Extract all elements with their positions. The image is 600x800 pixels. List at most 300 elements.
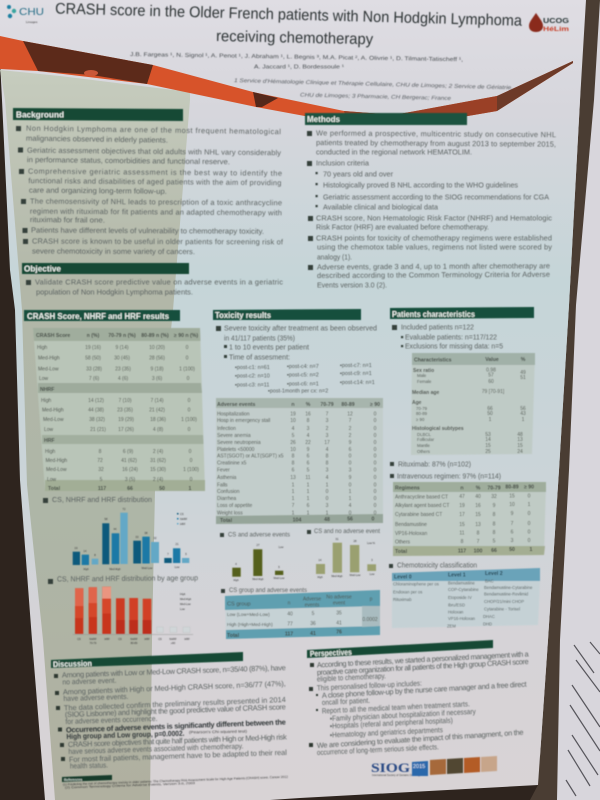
logo: CHU Limoges: CHU — [19, 7, 44, 18]
table: characteristics: 56 — [520, 406, 526, 412]
discussion text: CRASH score objectives that quite half patients with High or Med-High risk — [68, 732, 287, 749]
decorative wave band — [0, 36, 573, 124]
table: adverse events: 8 — [307, 418, 310, 424]
table: regimens: 8 — [493, 512, 496, 518]
table: chemotoxicity classification: Etoposide IV — [448, 595, 472, 600]
table: CRASH score results: Med-High — [46, 458, 67, 464]
table: adverse events: Hosp in emergency stall — [217, 418, 270, 424]
table: adverse events: 56 — [347, 516, 353, 522]
table: chemotoxicity classification: DHD — [483, 622, 492, 626]
heading: objective: Objective — [24, 264, 62, 274]
table: characteristics: 48 — [517, 432, 523, 438]
bullet 2: Geriatric assessment objectives that old adults with NHL vary considerably — [27, 146, 281, 157]
table: characteristics: 70-79 — [416, 406, 428, 411]
table: CRASH score results: 1 (100) — [179, 366, 195, 372]
table: CRASH score results: Med-Low — [46, 467, 67, 473]
bar chart: CS and no adverse event: 28 — [354, 539, 357, 543]
table: adverse events: 17 — [324, 440, 330, 446]
bar chart: CS and adverse events: 4 — [235, 562, 237, 566]
table: regimens: 0 — [528, 538, 531, 544]
table: adverse events: 8 — [292, 460, 295, 466]
discussion text: health status. — [70, 761, 108, 770]
table: adverse events: 0 — [349, 482, 352, 488]
methods text: CRASH points for toxicity of chemotherapy regimens were established — [316, 234, 552, 242]
table: CS group and adverse events: events — [305, 602, 320, 608]
table: adverse events: 6 — [307, 454, 310, 460]
table: chemotoxicity classification: CHOP/21/mini CHOP — [484, 599, 524, 604]
bullet 3 — [19, 167, 282, 197]
toxicity summary: 1 to 10 events per patient — [229, 342, 309, 352]
table: regimens: 32 — [491, 494, 497, 500]
perspectives text: oncall for patient. — [322, 696, 370, 707]
table: regimens — [393, 482, 546, 556]
table: adverse events: 10 — [290, 447, 296, 453]
bar chart: CS and adverse events — [232, 543, 284, 582]
table: chemotoxicity classification: Rituximab — [393, 597, 412, 602]
chart legend: CS — [180, 512, 184, 516]
table: adverse events: 3 — [326, 503, 329, 509]
table: regimens: 3 — [511, 538, 514, 544]
table: CRASH score results: 28 (56) — [149, 356, 165, 362]
heading: patients characteristics: Patients characteristics — [392, 310, 476, 319]
table: characteristics: 1 — [522, 417, 525, 423]
logo: SIOG 2015: International Society of Geriatric Oncology — [372, 773, 421, 777]
bullet 4: rituximab for frail one. — [30, 215, 105, 225]
toxicity summary: ▪post-c3: n=11 — [235, 382, 269, 388]
bar chart: CS, NHRF and HRF distribution: 21 — [176, 542, 179, 546]
table: regimens: 80-89 — [505, 484, 519, 490]
table: adverse events: 3 — [307, 426, 310, 432]
toxicity summary: ▪post-c2: n=10 — [235, 374, 270, 380]
table: CRASH score results: High — [45, 449, 56, 455]
table: regimens: 100 — [474, 548, 482, 554]
toxicity summary: ▪post-c4: n=7 — [287, 364, 319, 370]
toxicity summary: ▪post-c1: n=61 — [235, 365, 270, 371]
table: adverse events: Hospitalization — [217, 412, 250, 418]
table: adverse events: 9 — [307, 447, 310, 453]
table: characteristics: Follicular — [417, 437, 435, 442]
logo: UCOG HeLim — [529, 13, 570, 33]
objective text: population of Non Hodgkin Lymphoma patients. — [36, 288, 193, 296]
table: adverse events: 13 — [290, 475, 296, 481]
table: adverse events: 0 — [374, 468, 377, 474]
table: adverse events: % — [306, 402, 311, 408]
title: CRASH score in the Older French patients with Non Hodgkin Lymphoma — [55, 1, 523, 30]
stacked bar chart: distribution by age group: CS — [158, 637, 162, 641]
table: characteristics: 79 [70-91] — [482, 389, 505, 395]
table: regimens: n — [460, 486, 464, 492]
table: CRASH score results: 72 — [97, 458, 103, 464]
table: characteristics: Histological subtypes — [412, 426, 464, 432]
inclusion summary: Exclusions for missing data: n=5 — [405, 342, 503, 350]
table: chemotoxicity classification: ZEM — [447, 624, 456, 628]
methods text: Available clinical and biological data — [323, 202, 439, 212]
table: adverse events: 0 — [349, 510, 352, 516]
table: adverse events: 1 — [307, 496, 310, 502]
methods text: using the chemotox table values, regimens not listed were scored by — [317, 242, 552, 252]
table: adverse events: Fever — [217, 468, 230, 474]
table: CS group and adverse events: 40 — [287, 612, 293, 618]
table: chemotoxicity classification: Chloraminophene per os — [393, 582, 439, 586]
stacked bar chart: distribution by age group: HRF — [104, 637, 110, 641]
table: CRASH score results: 18 (36) — [150, 417, 166, 423]
table: adverse events: Confusion — [217, 489, 240, 495]
table: characteristics: 57 — [488, 372, 494, 378]
logo: SIOG 2015: SIOG — [371, 760, 410, 775]
table: regimens: 9 — [511, 511, 514, 517]
table: CRASH score results: 30 (45) — [114, 356, 130, 362]
methods text: We performed a prospective, multicentric study on consecutive NHL — [316, 129, 556, 139]
table: adverse events: 16 — [305, 412, 311, 418]
bar chart: CS and no adverse event: Low — [370, 572, 375, 576]
table: regimens: 47 — [459, 494, 465, 500]
table: chemotoxicity classification: Endoxan per os — [393, 590, 422, 594]
table: adverse events: 9 — [349, 475, 352, 481]
table: regimens: 15 — [475, 512, 481, 518]
bar chart: CS and adverse events: Med-Low — [274, 576, 284, 580]
bullet 1 — [16, 124, 281, 146]
table: CRASH score results: 0 — [189, 449, 192, 455]
toxicity summary: in 41/117 patients (35%) — [224, 334, 295, 342]
table: CRASH score results: 2 (4) — [153, 477, 163, 483]
bullet 1: Non Hodgkin Lymphoma are one of the most frequent hematological — [26, 124, 281, 136]
table: CRASH score results: ≥ 90 n (%) — [174, 333, 198, 339]
logo: CHU Limoges: Limoges — [26, 20, 38, 24]
methods text: Events version 3.0 (2). — [317, 280, 387, 290]
bullet 2: in performance status, comorbidities and functional reserve. — [27, 155, 230, 166]
table: CRASH score results: 0 — [186, 345, 189, 351]
table: adverse events: 11 — [305, 475, 311, 481]
perspectives text: occurrence of long-term serious side effects. — [317, 742, 439, 757]
table: regimens: Bendamustine — [395, 522, 427, 528]
stacked bar chart: distribution by age group: HRF — [184, 637, 190, 641]
table: CRASH score results: CRASH Score — [36, 333, 70, 339]
table: adverse events: 8 — [326, 460, 329, 466]
table: adverse events: 1 — [326, 510, 329, 516]
heading: results: CRASH Score, NHRF and HRF results — [27, 312, 170, 321]
bar chart: CS and adverse events: Med-High — [252, 577, 264, 581]
bullet 4 — [21, 197, 282, 226]
bar chart: CS, NHRF and HRF distribution: 14 — [84, 549, 87, 553]
table: adverse events: 1 — [307, 482, 310, 488]
table: CS group and adverse events: Adverse — [303, 596, 321, 602]
table: regimens: Total — [395, 549, 408, 555]
bullet 4: The chemosensivity of NHL leads to prescription of a toxic anthracycline — [30, 197, 282, 207]
table: adverse events: ≥ 90 — [370, 402, 380, 408]
methods text: Inclusion criteria — [316, 158, 370, 168]
table: CRASH score results: 21 (42) — [149, 408, 165, 414]
stacked bar chart: distribution by age group: NHRF — [169, 637, 177, 641]
heading: methods — [305, 113, 467, 125]
table: adverse events: 4 — [326, 447, 329, 453]
discussion text: Among patients with Low or Med-Low CRASH score, n=35/40 (87%), have — [62, 663, 286, 679]
table: regimens: Regimens — [395, 486, 420, 492]
table: CRASH score results: High — [41, 398, 52, 404]
table: CRASH score results: 32 — [98, 467, 104, 473]
table: regimens: 15 — [509, 494, 515, 500]
table: CRASH score results: Med-High — [42, 408, 64, 414]
authors — [130, 52, 464, 70]
table: CS group and adverse events: event — [333, 600, 346, 606]
table: adverse events: 0 — [374, 503, 377, 509]
table: characteristics: 50 — [487, 411, 493, 417]
table: chemotoxicity classification: Bendamustine-Revlimid — [484, 592, 529, 596]
table: adverse events: 0 — [326, 496, 329, 502]
table: adverse events: 19 — [290, 412, 296, 418]
bar chart: CS and no adverse event — [316, 537, 376, 579]
panel: perspectives — [307, 640, 530, 757]
table: CS group and adverse events: 77 — [287, 622, 293, 628]
table: adverse events: 0 — [349, 460, 352, 466]
table: adverse events: 0 — [374, 496, 377, 502]
table: regimens: 7 — [477, 539, 480, 545]
table: regimens: % — [476, 486, 481, 492]
bar chart: CS and adverse events: Low — [279, 545, 284, 549]
bar chart: CS and no adverse event: Med-Low — [350, 573, 360, 577]
table: adverse events: 0 — [374, 510, 377, 516]
bar chart: CS, NHRF and HRF distribution: 72 — [123, 507, 126, 511]
table: CRASH score results: 19 (16) — [85, 345, 101, 351]
table: adverse events: 1 — [292, 496, 295, 502]
table: CRASH score results: 0 — [188, 427, 191, 433]
table: characteristics: 66 — [487, 406, 493, 412]
methods text: Geriatric assessment according to the SIOG recommendations for CGA — [323, 192, 549, 202]
toxicity summary: ▪post-1month per cx: n=2 — [268, 388, 328, 394]
table: adverse events: Loss of appetite — [217, 503, 253, 509]
table: chemotoxicity classification: BAC — [485, 578, 494, 584]
table: characteristics: Age — [412, 400, 422, 406]
stacked bar chart: distribution by age group: 80-89 — [131, 641, 138, 645]
regimen summary — [390, 460, 501, 480]
stacked bar chart: distribution by age group: NHRF — [130, 637, 138, 641]
table: regimens: 15 — [459, 522, 465, 528]
perspectives text: ▪Hospitals (referal and peripheral hospitals) — [330, 716, 453, 730]
table: adverse events: 4 — [307, 433, 310, 439]
table: CRASH score results: Low — [47, 477, 57, 483]
table: characteristics: % — [521, 357, 526, 363]
table: adverse events: Total — [220, 518, 233, 524]
table: adverse events: 6 — [307, 503, 310, 509]
inclusion summary: Included patients n=122 — [401, 322, 474, 332]
affiliations: CHU de Limoges; 3 Pharmacie, CH Bergerac; France — [300, 93, 451, 102]
table: CRASH score results: 3 (5) — [125, 477, 135, 483]
table: regimens: 11 — [459, 530, 465, 536]
logo: SIOG 2015 — [371, 756, 497, 777]
table: adverse events: 7 — [326, 412, 329, 418]
table: adverse events: 0 — [374, 418, 377, 424]
table: adverse events: 0 — [326, 489, 329, 495]
logo: UCOG HeLim: HéLim — [543, 26, 569, 33]
table: regimens: 10 — [509, 502, 515, 508]
table: CS group and adverse events: Total — [227, 633, 240, 639]
table: CRASH score results: 44 (38) — [88, 408, 104, 414]
table: regimens: 50 — [509, 547, 515, 553]
discussion text — [54, 663, 287, 770]
table: CRASH score results: 16 (24) — [122, 467, 138, 473]
discussion text: The data collected confirm the preliminary results presented in 2014 — [64, 695, 286, 712]
table: CRASH score results: 33 (28) — [86, 366, 102, 372]
stacked bar chart: distribution by age group: HRF — [144, 637, 150, 641]
table: CRASH score results: 19 (29) — [118, 417, 134, 423]
chart legend: Med-High — [180, 597, 192, 601]
table: CRASH score results — [33, 328, 205, 492]
table: CRASH score results: 23 (35) — [117, 408, 133, 414]
table: adverse events: 0 — [372, 516, 375, 522]
heading: patients characteristics — [390, 307, 534, 319]
discussion text: have adverse events. — [63, 692, 129, 703]
bar chart: CS and no adverse event: 3 — [371, 558, 373, 562]
bullet 3: Comprehensive geriatric assessment is the best way to identify the — [28, 167, 282, 178]
table: adverse events: 0 — [374, 454, 377, 460]
table: adverse events: 9 — [349, 440, 352, 446]
table: CS group and adverse events: 41 — [336, 620, 342, 626]
table: characteristics: 24 — [517, 449, 523, 455]
bar chart: CS and no adverse event: Low % — [367, 541, 376, 545]
inclusion summary — [392, 322, 503, 350]
table: adverse events: 0 — [374, 482, 377, 488]
table: CRASH score results: HRF — [44, 438, 55, 444]
table: CRASH score results: Med-Low — [43, 417, 64, 423]
table: characteristics: 14 — [485, 437, 491, 443]
chart legend: Low — [180, 607, 185, 611]
bullet 4: regimen with rituximab for fit patients and an adapted chemotherapy with — [30, 207, 282, 217]
table: adverse events: 10 — [290, 418, 296, 424]
table: adverse events: 3 — [326, 468, 329, 474]
table: adverse events: 26 — [290, 440, 296, 446]
table: adverse events: 0 — [374, 433, 377, 439]
table: regimens: VP16-Holoxan — [395, 531, 427, 537]
perspectives text: A close phone follow-up by the nurse care manager and a free direct — [322, 680, 527, 700]
table: characteristics: 53 — [485, 432, 491, 438]
table: CRASH score results: 117 — [98, 486, 106, 492]
table: regimens: 13 — [475, 522, 481, 528]
chart legend: NHRF — [180, 517, 188, 521]
heading: perspectives — [307, 640, 493, 658]
table: regimens: Cytarabine based CT — [395, 512, 442, 518]
bar chart: CS and no adverse event: 14 — [319, 558, 322, 562]
panel: patients characteristics — [389, 307, 546, 628]
table: CS group and adverse events: 36 — [310, 621, 316, 627]
table: characteristics: 60 — [488, 379, 494, 385]
table: CS group and adverse events: No adverse — [326, 594, 352, 600]
toxicity summary: Severe toxicity after treatment as been observed — [224, 324, 377, 332]
table: CRASH score results: 15 (30) — [150, 467, 166, 473]
panel: discussion — [51, 652, 288, 789]
bullet 5: Patients have different levels of vulnerability to chemotherapy toxicity. — [31, 226, 264, 236]
discussion text: (SIOG Lisbonne) and highlight the good predictive value of CRASH score — [65, 702, 286, 719]
table: characteristics: ≥ 90 — [416, 417, 425, 422]
table: chemotoxicity classification: Ibru/ESD — [448, 602, 465, 608]
chart heading: distribution by age group: CS, NHRF and HRF distribution by age group — [57, 573, 198, 583]
table: CRASH score results: 38 (32) — [89, 417, 105, 423]
table: CS group and adverse events: 35 — [336, 610, 342, 616]
table: regimens: 117 — [458, 548, 466, 554]
table: adverse events: n — [291, 402, 295, 408]
methods text: analogy (1). — [317, 252, 352, 262]
table: CS group and adverse events: 41 — [310, 631, 316, 637]
table: characteristics: 0.98 — [486, 368, 496, 374]
methods text: conducted in the regional network HEMATOLIM. — [316, 148, 472, 156]
table: regimens: 8 — [493, 522, 496, 528]
table: characteristics: 49 — [520, 370, 526, 376]
table: adverse events: 80-89 — [341, 402, 355, 408]
table: CRASH score results: Med-High — [38, 356, 60, 362]
toxicity summary: ▪post-c14: n=1 — [340, 380, 375, 386]
table: adverse events: 6 — [349, 447, 352, 453]
perspectives text — [309, 649, 530, 757]
affiliations — [234, 78, 513, 102]
heading: background — [13, 108, 183, 121]
table: chemotoxicity classification: Cytarabine - Torisel — [484, 606, 520, 612]
table: characteristics: 1 — [489, 417, 492, 423]
table: CS group and adverse events: 5 — [312, 611, 315, 617]
bar chart: CS, NHRF and HRF distribution: 5 — [185, 552, 187, 556]
heading: discussion — [51, 652, 243, 669]
stacked bar chart: distribution by age group: CS — [118, 637, 122, 641]
inclusion summary: Evaluable patients: n=117/122 — [405, 332, 497, 342]
toxicity summary: ▪post-c5: n=2 — [287, 372, 319, 378]
title — [55, 1, 523, 48]
bar chart: CS, NHRF and HRF distribution: 32 — [154, 536, 157, 540]
bullet 6: severe chemotoxicity in some variety of cancers. — [32, 247, 195, 256]
stacked bar chart: distribution by age group — [73, 587, 193, 645]
discussion text: Among patients with High or Med-High CRASH score, n=36/77 (47%), — [63, 679, 286, 696]
table: CRASH score results: Total — [48, 486, 61, 492]
table: characteristics: 15 — [517, 443, 523, 449]
table: adverse events: Adverse events — [217, 402, 255, 408]
chart heading: CS and adverse events: CS and adverse events — [228, 532, 290, 538]
table: characteristics: Mantle — [417, 443, 431, 448]
table: adverse events: 0 — [374, 440, 377, 446]
stacked bar chart: distribution by age group: ≥90 — [171, 641, 176, 645]
logo: SIOG 2015: 2015 — [413, 764, 425, 770]
table: adverse events: 8 — [292, 454, 295, 460]
references: References — [64, 778, 82, 782]
bar chart: CS, NHRF and HRF distribution: High — [83, 567, 89, 571]
table: CRASH score results: 8 — [99, 449, 102, 455]
references — [62, 775, 288, 789]
chart heading: CS group and adverse events: CS group and adverse events — [229, 587, 307, 594]
table: CRASH score results: 23 (35) — [115, 366, 131, 372]
chart legend — [177, 512, 188, 526]
table: adverse events: Weight loss — [217, 510, 243, 516]
table: adverse events: Creatinine x5 — [217, 460, 247, 466]
table: adverse events: 1 — [307, 489, 310, 495]
table: CRASH score results: 4 (8) — [153, 427, 163, 433]
table: adverse events: 4 — [349, 503, 352, 509]
table: characteristics: 15 — [485, 443, 491, 449]
table: CRASH score results: Low — [39, 376, 49, 382]
table: CRASH score results: Med-Low — [38, 366, 59, 372]
table: adverse events: 2 — [326, 426, 329, 432]
table: chemotoxicity classification: Holoxan — [448, 610, 464, 614]
table: adverse events: 1 — [292, 482, 295, 488]
table: characteristics: 13 — [517, 437, 523, 443]
chart legend: High — [180, 592, 186, 596]
discussion text: Occurrence of adverse events is significantly different between the — [66, 717, 286, 734]
bullet 6 — [23, 237, 284, 256]
table: regimens: Alkylant agent based CT — [395, 503, 449, 509]
methods text: described according to the Common Terminology Criteria for Adverse — [317, 270, 550, 280]
bullet 3: care and organizing long-term follow-up. — [29, 186, 167, 196]
table: adverse events: 0 — [374, 475, 377, 481]
table: regimens: 6 — [511, 530, 514, 536]
table: CRASH score results: 4 (6) — [118, 376, 128, 382]
table: adverse events: 22 — [305, 440, 311, 446]
table: characteristics: 43 — [520, 411, 526, 417]
perspectives text: ▪Family physician about hospitalization if necessary — [330, 707, 476, 723]
perspectives text: ▪Hematology and geriatrics departments — [330, 725, 443, 739]
